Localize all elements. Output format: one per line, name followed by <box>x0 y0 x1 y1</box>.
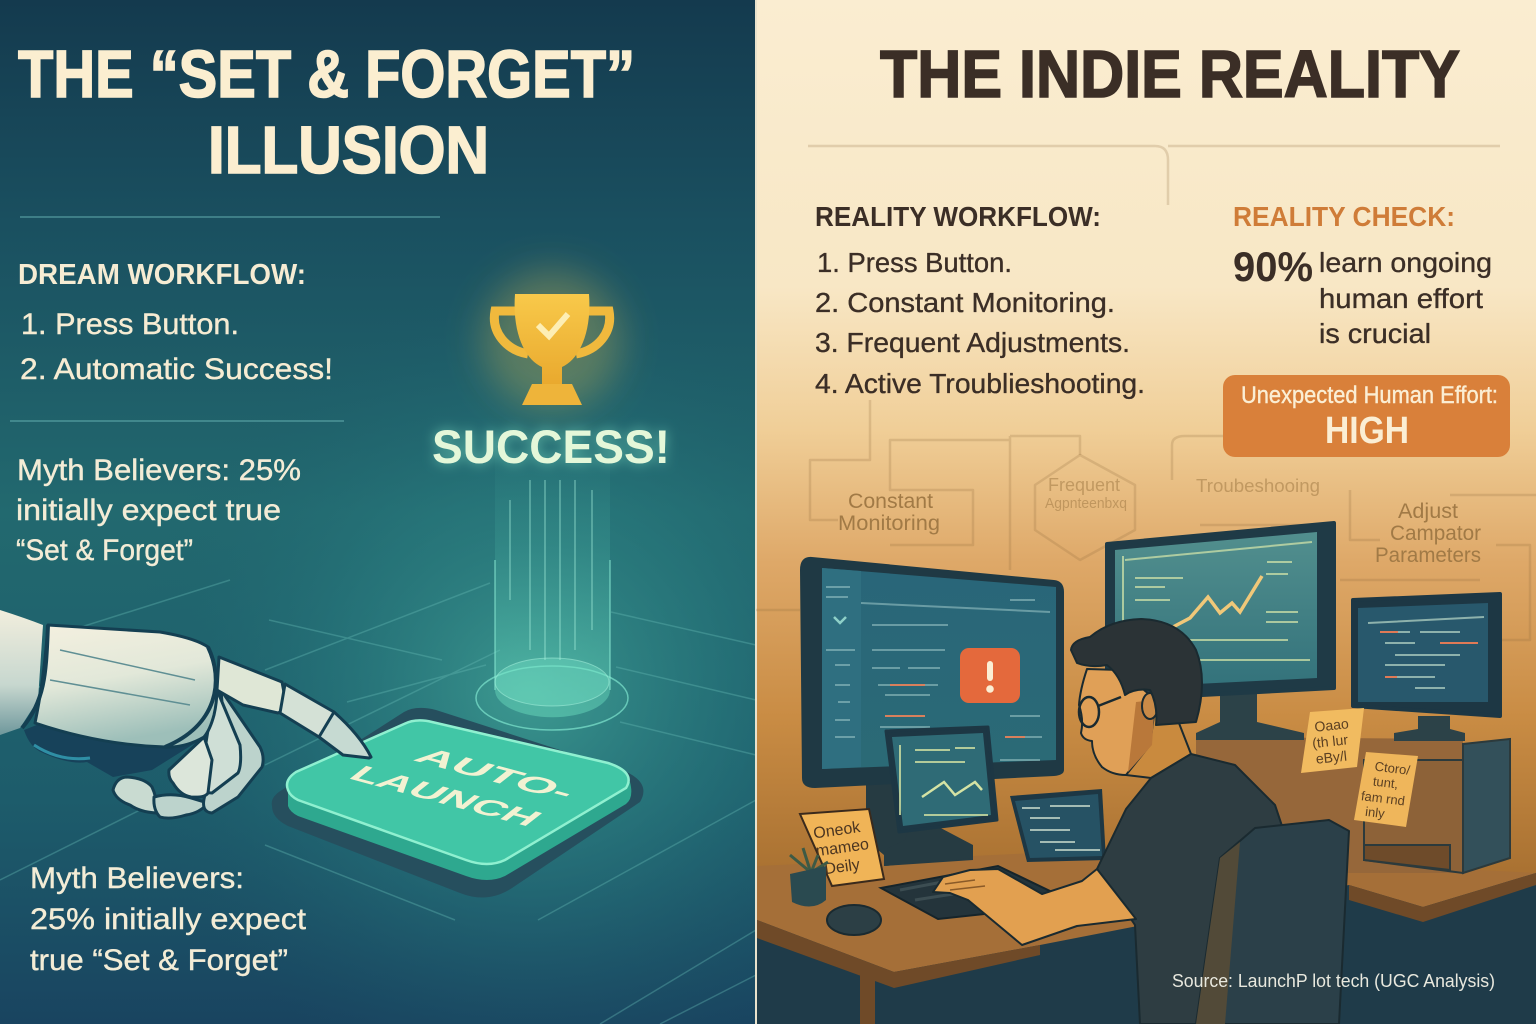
text: myth believers lower: true “Set & Forget” <box>30 944 288 977</box>
text: myth believers upper: “Set & Forget” <box>16 534 193 567</box>
faint workflow labels: Adjust <box>1398 500 1458 523</box>
button: auto-launch: LAUNCH <box>342 761 550 831</box>
desk <box>757 737 1536 1024</box>
keyboard <box>881 866 1077 919</box>
sticky note: right: Ctoro/ <box>1374 759 1411 778</box>
text: reality workflow: 1. Press Button. <box>817 247 1012 278</box>
text: source: Source: LaunchP lot tech (UGC Analysis) <box>1172 971 1495 991</box>
sticky note: right: inly <box>1364 804 1386 821</box>
sticky note: center: (th lur <box>1311 731 1349 751</box>
faint workflow labels <box>838 475 1481 567</box>
sticky note: center: Oaao <box>1314 715 1350 735</box>
faint workflow labels: Troubeshooing <box>1196 476 1320 496</box>
text: myth believers lower: Myth Believers: <box>30 862 244 895</box>
text: reality check: is crucial <box>1319 318 1431 349</box>
text: reality check <box>1233 201 1492 349</box>
illustration: person <box>933 619 1349 1024</box>
callout: unexpected human effort: HIGH <box>1325 410 1409 452</box>
light beam cylinder <box>476 405 628 730</box>
title: set and forget illusion: THE “SET & FORGET” <box>18 37 635 112</box>
sticky note: right <box>1354 752 1418 827</box>
callout: unexpected human effort <box>1223 375 1510 457</box>
faint workflow labels: Parameters <box>1375 544 1481 567</box>
illustration: robot hand <box>0 610 371 818</box>
text: myth believers upper: initially expect true <box>16 494 281 527</box>
faint workflow labels: Agpnteenbxq <box>1045 495 1127 512</box>
icon: alert badge <box>960 648 1020 703</box>
title: indie reality: THE INDIE REALITY <box>880 37 1460 112</box>
faint workflow labels: Monitoring <box>838 512 940 535</box>
text: reality check: REALITY CHECK: <box>1233 201 1455 232</box>
sticky note: right: tunt, <box>1372 774 1399 791</box>
callout: unexpected human effort: Unexpected Human Effort: <box>1241 382 1498 409</box>
text: myth believers upper: Myth Believers: 25% <box>17 454 301 487</box>
text: reality workflow: REALITY WORKFLOW: <box>815 201 1101 232</box>
sticky note: left: Deily <box>823 856 861 878</box>
text: success: SUCCESS! <box>432 420 670 473</box>
text: dream workflow <box>18 259 333 386</box>
sticky note: center: eBy/l <box>1315 748 1348 767</box>
button: auto-launch <box>272 708 643 897</box>
monitor: small chart <box>884 727 997 866</box>
text: reality check: human effort <box>1319 283 1483 314</box>
text: dream workflow: DREAM WORKFLOW: <box>18 259 306 291</box>
text: reality workflow: 4. Active Troublieshooting. <box>815 368 1145 399</box>
icon: mouse <box>827 905 881 935</box>
icon: plant <box>790 848 828 907</box>
panel: set and forget illusion <box>0 0 756 1024</box>
monitor: back chart <box>1107 523 1334 740</box>
monitor: side code <box>1353 594 1500 741</box>
text: myth believers upper <box>16 454 301 567</box>
icon: trophy <box>482 270 622 410</box>
faint workflow labels: Constant <box>848 490 933 513</box>
icon: computer tower <box>1364 739 1510 873</box>
text: myth believers lower: 25% initially expect <box>30 903 307 936</box>
sticky note: center <box>1301 708 1364 773</box>
text: myth believers lower <box>30 862 307 977</box>
sticky note: left: Oneok <box>812 819 862 842</box>
text: success: SUCCESS! <box>432 420 670 473</box>
text: dream workflow: 1. Press Button. <box>21 308 239 341</box>
monitor: main with alert <box>800 557 1064 866</box>
sticky note: left <box>800 809 884 886</box>
sticky note: left: mameo <box>815 836 870 860</box>
text: reality check: 90% <box>1233 243 1313 290</box>
text: reality workflow <box>815 201 1145 399</box>
text: dream workflow: 2. Automatic Success! <box>20 353 333 386</box>
text: reality workflow: 2. Constant Monitoring. <box>815 287 1115 318</box>
faint workflow labels: Frequent <box>1048 475 1120 495</box>
text: reality workflow: 3. Frequent Adjustments. <box>815 327 1130 358</box>
button: auto-launch: AUTO- <box>407 743 585 805</box>
text: reality check: learn ongoing <box>1319 247 1492 278</box>
panel: indie reality <box>755 0 1536 1024</box>
tablet <box>1010 789 1106 862</box>
sticky note: right: fam rnd <box>1360 788 1406 808</box>
title: set and forget illusion <box>18 37 635 188</box>
title: set and forget illusion: ILLUSION <box>208 113 489 188</box>
faint workflow labels: Campator <box>1390 522 1481 545</box>
